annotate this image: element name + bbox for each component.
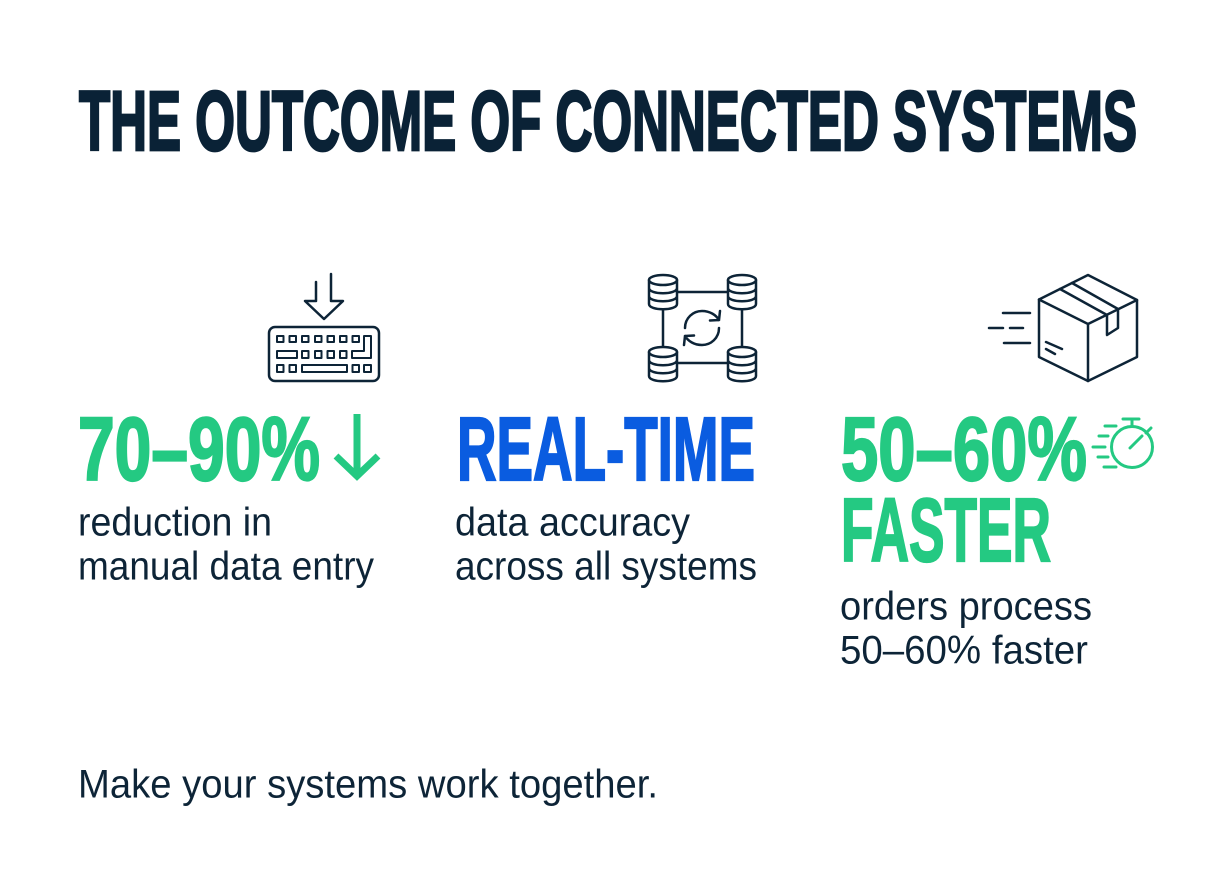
stat: 50–60%: 50–60% <box>841 400 1087 500</box>
icon: moving package box <box>989 275 1137 381</box>
stat: REAL-TIME: REAL-TIME <box>457 400 755 500</box>
panel: manual data entry reduction <box>78 274 379 588</box>
panel: real-time data accuracy <box>455 275 757 588</box>
description: orders process 50–60% faster: 50–60% faster <box>840 628 1088 672</box>
stat: FASTER: FASTER <box>841 481 1051 581</box>
icon: green down arrow <box>336 414 378 476</box>
description: reduction in manual data entry: reduction in <box>78 500 272 544</box>
icon: keyboard with down arrow <box>269 274 379 381</box>
description: reduction in manual data entry <box>78 500 374 588</box>
description: orders process 50–60% faster: orders process <box>840 584 1092 628</box>
closing tagline: Make your systems work together. <box>78 762 658 806</box>
icon: connected databases with sync arrows <box>649 275 756 381</box>
description: data accuracy across all systems: across all systems <box>455 544 757 588</box>
description: data accuracy across all systems: data accuracy <box>455 500 690 544</box>
stat: 70–90%: 70–90% <box>78 400 320 500</box>
icon: stopwatch <box>1093 419 1152 468</box>
description: orders process 50–60% faster <box>840 584 1092 672</box>
description: reduction in manual data entry: manual data entry <box>78 544 374 588</box>
panel: faster order processing <box>840 275 1152 672</box>
description: data accuracy across all systems <box>455 500 757 588</box>
